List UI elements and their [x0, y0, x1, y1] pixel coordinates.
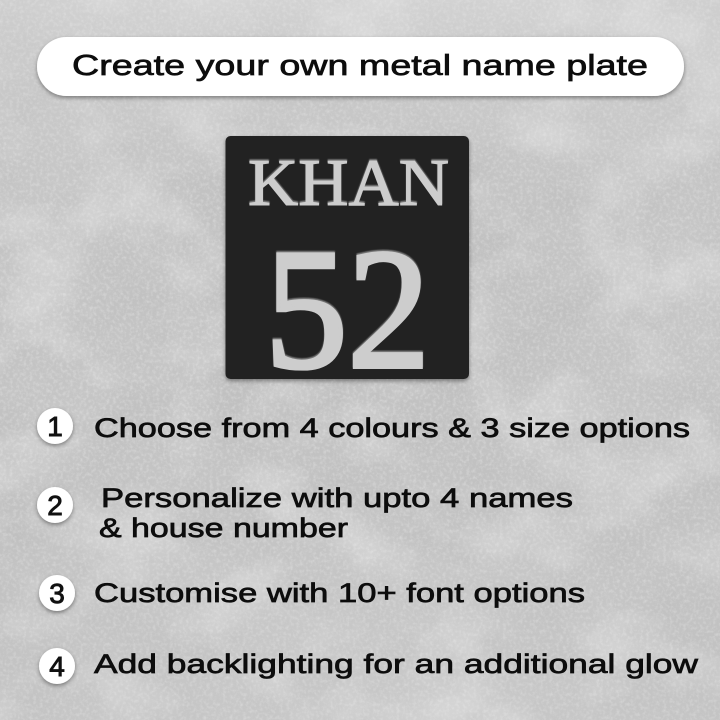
plate name: KHAN: KHAN	[248, 146, 449, 220]
step 2	[37, 483, 573, 543]
title banner	[37, 37, 684, 96]
badge 4: 4	[49, 651, 65, 682]
plate number: 52: 52	[265, 215, 430, 405]
step 2 text: Personalize with upto 4 names	[101, 483, 573, 513]
badge 4	[39, 648, 75, 684]
badge 3	[39, 575, 75, 611]
step 1 text: Choose from 4 colours & 3 size options	[94, 413, 690, 443]
step 1	[37, 408, 690, 444]
step 4 text: Add backlighting for an additional glow	[94, 649, 699, 679]
badge 2	[37, 487, 73, 523]
badge 2: 2	[47, 490, 63, 521]
badge 1: 1	[47, 411, 63, 442]
badge 1	[37, 408, 73, 444]
title banner: Create your own metal name plate	[72, 50, 648, 82]
step 2 text: & house number	[99, 513, 348, 543]
step 3	[39, 575, 585, 611]
step 2 text	[99, 483, 573, 543]
badge 3: 3	[49, 578, 65, 609]
step 4	[39, 648, 699, 684]
step 3 text: Customise with 10+ font options	[94, 578, 585, 608]
name plate	[226, 136, 469, 405]
